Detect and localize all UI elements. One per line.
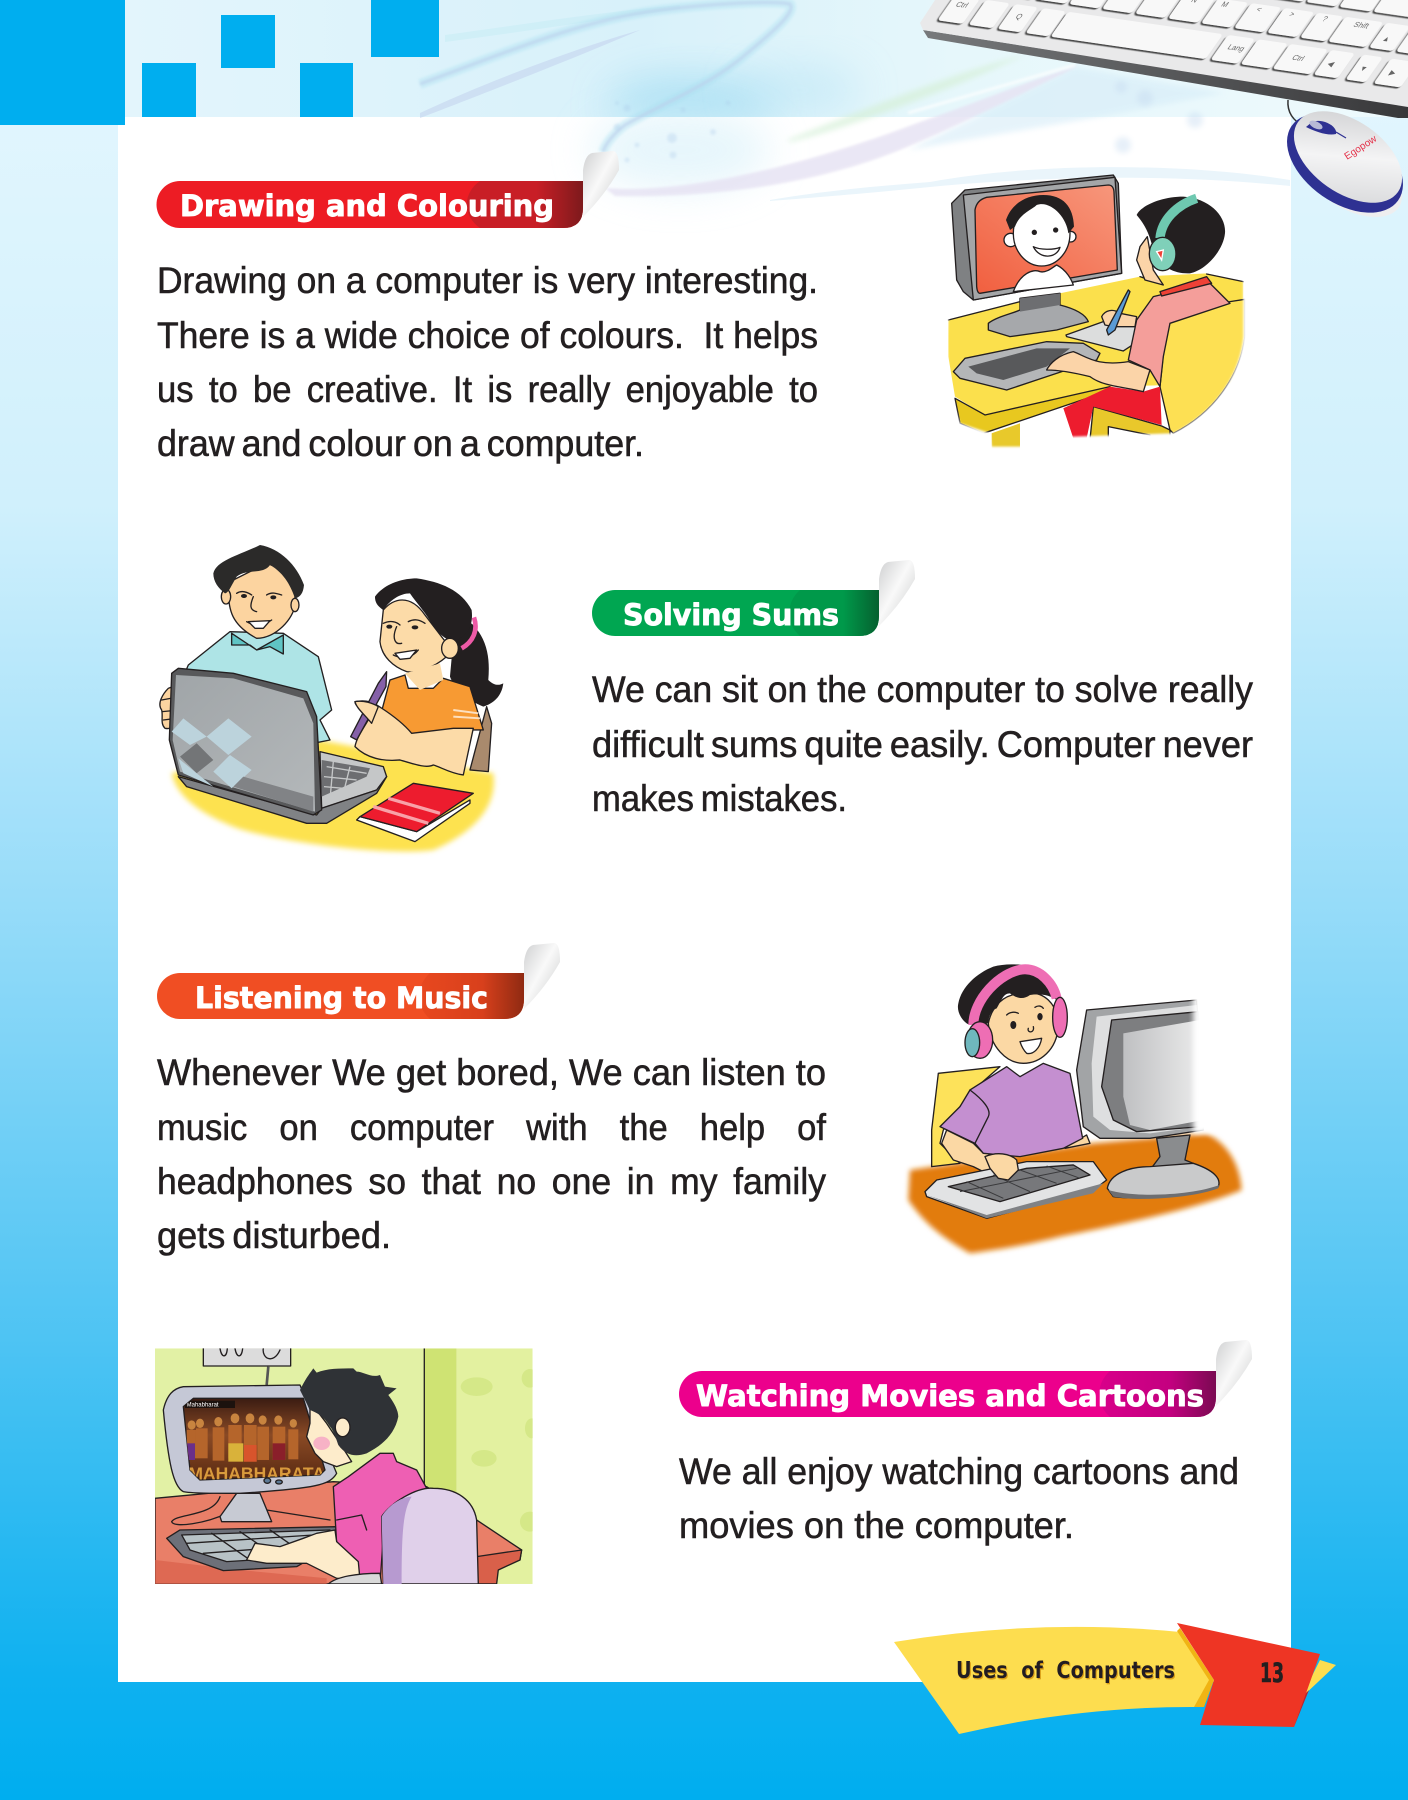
book — [357, 783, 473, 842]
monitor — [952, 175, 1122, 337]
page number: 13 — [1260, 1658, 1284, 1689]
heading badge: drawing and colouring — [156, 151, 619, 228]
heading badge: listening to music: Listening to Music — [195, 981, 488, 1015]
heading badge: solving sums: Solving Sums — [623, 598, 839, 632]
illustration: man and girl with laptop — [160, 545, 503, 851]
white page panel — [118, 117, 1291, 1682]
icon: keyboard: < — [1254, 5, 1264, 14]
icon: keyboard: ▶ — [1387, 68, 1399, 77]
monitor — [163, 1385, 337, 1522]
chair — [932, 1067, 1000, 1167]
text block: music paragraph: gets disturbed. — [157, 1215, 391, 1256]
chapter title: Uses of Computers — [956, 1658, 1175, 1684]
man — [160, 545, 332, 743]
heading badge: watching movies and cartoons: Watching Movies and Cartoons — [696, 1379, 1204, 1413]
boy head — [300, 1368, 398, 1467]
illustration: boy watching a movie — [155, 1345, 540, 1584]
wall — [155, 1348, 540, 1584]
monitor — [1077, 993, 1219, 1199]
text block: drawing paragraph — [157, 260, 818, 464]
icon: keyboard: ▲ — [1380, 34, 1393, 43]
text block: music paragraph: Whenever We get bored, We can listen to — [157, 1052, 826, 1093]
section: drawing and colouring — [156, 151, 1245, 464]
text block: music paragraph: music on computer with the help of — [157, 1107, 827, 1148]
icon: keyboard — [920, 0, 1408, 118]
icon: keyboard: Lang — [1226, 43, 1247, 53]
boy head with headphones — [1137, 197, 1225, 285]
icon: mouse — [1269, 93, 1408, 234]
corner block squares — [0, 0, 439, 125]
icon: keyboard: Ctrl — [954, 0, 970, 10]
girl — [351, 578, 503, 775]
ribbon tail — [1301, 1660, 1336, 1698]
red flag — [1177, 1623, 1320, 1727]
text block: music paragraph: headphones so that no one in my family — [157, 1161, 826, 1202]
text block: drawing paragraph: There is a wide choice of colours. It helps — [157, 315, 818, 356]
illustration: boy drawing on computer — [948, 175, 1245, 450]
text block: movies paragraph — [679, 1451, 1239, 1546]
section: watching movies and cartoons — [155, 1340, 1252, 1584]
table — [172, 740, 494, 851]
keyboard — [925, 1162, 1107, 1218]
icon: keyboard: > — [1287, 10, 1297, 19]
text block: music paragraph — [157, 1052, 827, 1256]
desk — [908, 1133, 1242, 1253]
text block: solving paragraph — [592, 669, 1253, 819]
section: listening to music — [157, 943, 1242, 1256]
chair — [328, 1488, 478, 1584]
text block: movies paragraph: We all enjoy watching cartoons and — [679, 1451, 1239, 1492]
keyboard and tablet — [953, 322, 1137, 390]
icon: keyboard: Shift — [1352, 20, 1372, 30]
icon: keyboard: M — [1219, 0, 1231, 9]
boy torso and arm — [1047, 277, 1230, 392]
section: solving sums — [160, 545, 1253, 851]
top wave band — [363, 0, 1390, 117]
boy arm and shirt — [247, 1453, 427, 1584]
wall socket and cable — [203, 1345, 291, 1385]
text block: solving paragraph: makes mistakes. — [592, 778, 847, 819]
text block: drawing paragraph: us to be creative. It is really enjoyable to — [157, 369, 818, 410]
heading badge: solving sums — [592, 560, 915, 636]
chair — [1090, 299, 1245, 442]
decorative waves — [420, 2, 1290, 201]
text block: movies paragraph: movies on the computer. — [679, 1505, 1074, 1546]
icon: keyboard: ? — [1320, 15, 1330, 23]
icon: mouse: Egopow — [1343, 133, 1380, 163]
laptop — [169, 668, 387, 823]
boy head — [958, 964, 1067, 1063]
text block: solving paragraph: difficult sums quite easily. Computer never — [592, 724, 1253, 765]
heading badge: watching movies and cartoons — [679, 1340, 1252, 1417]
heading badge: listening to music — [157, 943, 560, 1019]
hand on keyboard — [985, 1154, 1018, 1180]
icon: keyboard: ▼ — [1357, 64, 1370, 73]
icon: keyboard: Ctrl — [1290, 53, 1307, 63]
footer ribbon: chapter title and page number — [894, 1623, 1336, 1734]
desk — [948, 273, 1243, 450]
keyboard — [167, 1527, 337, 1571]
movie poster on screen: MAHABHARATA — [188, 1463, 325, 1483]
text block: drawing paragraph: draw and colour on a computer. — [157, 423, 644, 464]
yellow ribbon — [894, 1627, 1213, 1734]
text block: drawing paragraph: Drawing on a computer is very interesting. — [157, 260, 818, 301]
desk — [155, 1482, 522, 1584]
icon: keyboard: ◀ — [1325, 59, 1337, 68]
movie poster on screen: Mahabharat — [187, 1403, 219, 1409]
text block: solving paragraph: We can sit on the computer to solve really — [592, 669, 1253, 710]
icon: keyboard: Q — [1014, 12, 1025, 21]
heading badge: drawing and colouring: Drawing and Colouring — [180, 189, 554, 223]
illustration: boy with pink headphones — [908, 964, 1242, 1253]
boy body — [940, 1063, 1090, 1180]
trousers — [1063, 387, 1162, 438]
movie poster on screen — [185, 1401, 325, 1483]
